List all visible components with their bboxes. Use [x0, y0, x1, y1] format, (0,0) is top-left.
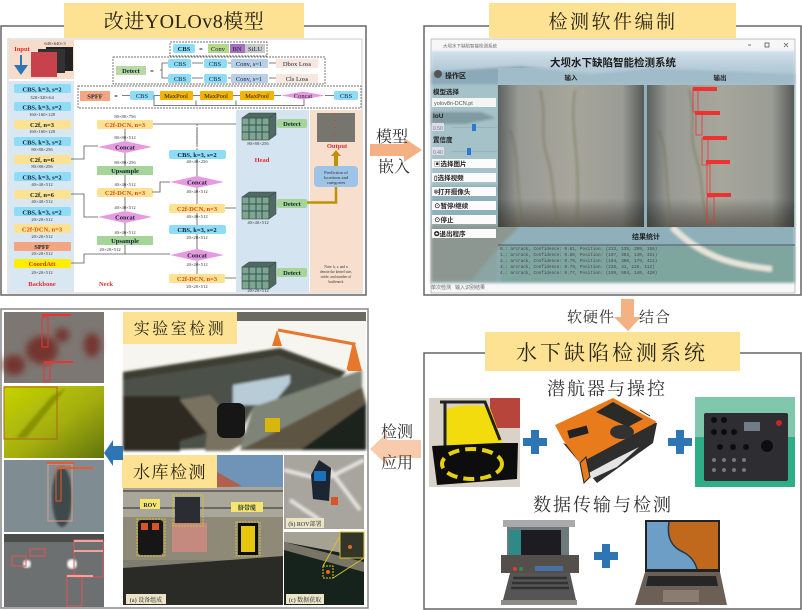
- sidebar controls: ⊙停止: [434, 215, 454, 224]
- background landscape: [431, 51, 795, 283]
- heading: laboratory test: 实验室检测: [134, 320, 226, 338]
- CBS definition: =: [199, 46, 203, 53]
- sidebar controls: ▣选择图片: [434, 159, 466, 168]
- PAN column: 40×40×256: [186, 159, 208, 164]
- output column: Prediction of: [324, 170, 348, 175]
- subheading: vehicle and control: 潜航器与操控: [547, 379, 667, 399]
- neck column: C2f-DCN, n=3: [105, 190, 146, 197]
- photo: dark wall cracks: [4, 534, 104, 607]
- SPFF definition: CBS: [340, 93, 353, 100]
- icon: plus: [668, 430, 692, 454]
- panel: experiments: [1, 309, 368, 608]
- SPFF definition: MaxPool: [204, 93, 228, 100]
- status bar: 输入识别结果: [455, 284, 485, 291]
- backbone column: 40×40×512: [31, 182, 53, 187]
- sidebar controls: yolov8n-DCN.pt: [434, 101, 473, 107]
- neck column: 40×40×512: [114, 205, 136, 210]
- PAN column: CBS, k=3, s=2: [177, 227, 217, 234]
- backbone column: [9, 81, 74, 292]
- Detect definition: CBS: [209, 61, 222, 68]
- PAN column: 20×20×512: [186, 284, 208, 289]
- backbone column: 20×20×512: [31, 270, 53, 275]
- photo: laptop: [635, 520, 727, 605]
- SPFF definition: MaxPool: [245, 93, 269, 100]
- arrow: detection application: [370, 423, 421, 472]
- neck column: 80×80×256: [114, 160, 136, 165]
- results area: 2.: arcrack, Confidence: 0.79, Position: (194, 300, 179, 411): [500, 259, 657, 264]
- photo: cable reel: [429, 398, 520, 487]
- sidebar controls: ▯选择视频: [434, 173, 464, 182]
- icon: plus: [523, 430, 547, 454]
- Detect definition: Detect: [122, 68, 141, 75]
- input block: [9, 40, 74, 79]
- Detect definition: [113, 57, 325, 84]
- output column: categories: [327, 180, 346, 185]
- neck column: Concat: [115, 144, 136, 152]
- neck column: 80×80×756: [114, 114, 136, 119]
- sidebar controls: [432, 70, 497, 238]
- output column: [307, 110, 362, 292]
- Detect definition: Cls Loss: [286, 76, 309, 83]
- head column: Detect: [283, 201, 302, 208]
- PAN column: C2f-DCN, n=3: [177, 206, 218, 213]
- PAN column: 40×40×512: [186, 214, 208, 219]
- photo: rust damage: [3, 312, 104, 383]
- CBS definition: [170, 42, 267, 56]
- results area: 4.: arcrack, Confidence: 0.77, Position: (199, 504, 140, 420): [500, 271, 657, 276]
- input block: 640×640×3: [44, 41, 66, 46]
- neck column: 40×40×512: [114, 230, 136, 235]
- CBS definition: CBS: [178, 46, 191, 53]
- Detect definition: Conv, s=1: [236, 61, 262, 68]
- subheading: data transmission: 数据传输与检测: [533, 495, 673, 515]
- CBS definition: BN: [232, 46, 242, 53]
- backbone column: CBS, k=3, s=2: [22, 86, 62, 94]
- arrow: hardware software combination: [567, 299, 671, 331]
- heading: detection system: 水下缺陷检测系统: [516, 341, 708, 365]
- output column: Output: [327, 143, 348, 150]
- head column: Detect: [283, 270, 302, 277]
- backbone column: CoordAtt: [29, 261, 56, 268]
- neck column: C2f-DCN, n=3: [105, 122, 146, 129]
- backbone column: 320×320×64: [30, 95, 54, 100]
- backbone column: SPFF: [34, 244, 50, 251]
- backbone column: CBS, k=3, s=2: [22, 140, 62, 146]
- arrow: model embedding: 嵌入: [378, 158, 410, 176]
- backbone column: CBS, k=3, s=2: [22, 174, 62, 182]
- arrow: model embedding: 模型: [376, 127, 408, 146]
- backbone column: 20×20×512: [31, 251, 53, 256]
- backbone column: CBS, k=3, s=2: [22, 104, 62, 112]
- head column: [236, 110, 309, 293]
- sidebar controls: 模型选择: [433, 87, 460, 96]
- neck column: Neck: [99, 281, 113, 288]
- sidebar controls: ✪退出程序: [434, 229, 466, 238]
- results area: [498, 232, 795, 276]
- neck column: Upsample: [111, 168, 139, 175]
- software window: [431, 39, 795, 293]
- head column: Head: [255, 157, 270, 164]
- software window: 大坝水下缺陷智能检测系统: [550, 56, 676, 69]
- input block: Input: [14, 46, 31, 53]
- photo: field console: [501, 520, 579, 605]
- sidebar controls: IoU: [433, 113, 444, 120]
- results area: 3.: arcrack, Confidence: 0.79, Position: (238, 41, 226, 112): [500, 265, 655, 270]
- software window: 输出: [714, 73, 726, 82]
- heading: reservoir test: 水库检测: [133, 463, 207, 482]
- photo: data acquisition: (c) 数据获取: [289, 596, 321, 604]
- arrow: model embedding: [370, 127, 422, 176]
- head column: 20×20×512: [247, 288, 269, 293]
- backbone column: CBS, k=3, s=2: [22, 210, 62, 216]
- arrow: detection application: 检测: [381, 423, 413, 441]
- backbone column: 40×40×512: [31, 199, 53, 204]
- software window: 大坝水下缺陷智能检测系统: [443, 42, 497, 50]
- output column: denote the kernel size,: [320, 270, 352, 275]
- backbone column: C2f-DCN, n=3: [22, 226, 63, 234]
- backbone column: Backbone: [28, 281, 56, 288]
- arrow: result blue: [104, 440, 123, 466]
- heading: reservoir test: [122, 455, 217, 488]
- photo: algae green: [4, 386, 104, 458]
- sidebar controls: 置信度: [433, 135, 453, 144]
- heading: improved YOLOv8: 改进YOLOv8模型: [104, 10, 264, 33]
- heading: laboratory test: [123, 312, 237, 344]
- photo: spalling: [4, 460, 104, 532]
- neck column: Upsample: [111, 238, 139, 245]
- SPFF definition: MaxPool: [164, 93, 188, 100]
- heading: improved YOLOv8: [64, 3, 304, 38]
- Detect definition: Conv, s=1: [236, 76, 262, 83]
- head column: 80×80×256: [247, 141, 269, 146]
- backbone column: 160×160×128: [29, 129, 56, 134]
- photo: reservoir equipment: (a) 设备组成: [130, 596, 162, 604]
- PAN column: Concat: [187, 252, 208, 260]
- SPFF definition: Concat: [294, 93, 312, 100]
- photo: ROV: [555, 398, 657, 483]
- CBS definition: SiLU: [248, 46, 262, 53]
- SPFF definition: [78, 86, 361, 108]
- photo: data acquisition: [284, 532, 364, 605]
- sidebar controls: 0.50: [433, 126, 443, 132]
- Detect definition: CBS: [174, 76, 187, 83]
- neck column: 20×20×512: [99, 247, 121, 252]
- backbone column: C2f, n=6: [30, 192, 55, 199]
- arrow: hardware software combination: 结合: [639, 309, 671, 326]
- sidebar controls: ⌾打开摄像头: [434, 187, 471, 196]
- head column: Detect: [283, 121, 302, 128]
- panel: underwater defect detection system: [424, 332, 801, 609]
- photo: reservoir equipment: [123, 455, 283, 605]
- results area: 1.: arcrack, Confidence: 0.80, Position: (197, 403, 140, 321): [500, 253, 657, 258]
- Detect definition: =: [150, 68, 154, 75]
- sidebar controls: 0.40: [433, 150, 443, 156]
- PAN column: 40×40×512: [186, 189, 208, 194]
- software window: 输入: [564, 73, 578, 82]
- results area: 0.: arcrack, Confidence: 0.81, Position: (213, 135, 299, 155): [500, 247, 657, 252]
- input photo: [498, 85, 644, 227]
- output photo: [647, 85, 794, 227]
- panel: detection software: [424, 3, 801, 295]
- SPFF definition: SPFF: [87, 94, 103, 100]
- sidebar controls: 操作区: [445, 71, 466, 80]
- PAN column: CBS, k=3, s=2: [177, 152, 217, 159]
- arrow: detection application: 应用: [381, 454, 413, 472]
- PAN column: C2f-DCN, n=3: [177, 276, 218, 283]
- PAN column: Concat: [187, 180, 208, 186]
- status bar: [431, 284, 485, 291]
- neck column: [71, 114, 242, 288]
- panel: improved YOLOv8 model: [1, 3, 366, 295]
- backbone column: 160×160×128: [29, 112, 56, 117]
- backbone column: 20×20×512: [31, 234, 53, 239]
- backbone column: 80×80×256: [31, 147, 53, 152]
- head column: 40×40×512: [247, 220, 269, 225]
- heading: detection system: [485, 332, 740, 371]
- status bar: 单次检测: [431, 284, 451, 291]
- backbone column: 20×20×512: [31, 217, 53, 222]
- PAN column: 20×20×512: [186, 235, 208, 240]
- Detect definition: CBS: [174, 61, 187, 68]
- photo: reservoir equipment: ROV: [143, 503, 157, 509]
- arrow: hardware software combination: 软硬件: [567, 309, 615, 326]
- output column: stride, and number of: [321, 275, 352, 280]
- photo: reservoir equipment: 脐带缆: [238, 504, 256, 512]
- heading: detection software: [489, 3, 736, 38]
- results area: 结果统计: [632, 232, 660, 241]
- Detect definition: Dbox Loss: [283, 61, 312, 68]
- SPFF definition: =: [114, 94, 118, 100]
- photo: ROV deployment: [284, 455, 364, 529]
- output column: Note: k, s, and n: [324, 265, 348, 270]
- CBS definition: Conv: [211, 46, 226, 53]
- neck column: Concat: [115, 214, 136, 222]
- photo: ROV deployment: (b) ROV部署: [288, 520, 322, 528]
- neck column: 40×40×512: [114, 182, 136, 187]
- output column: locations and: [324, 175, 349, 180]
- PAN column: [169, 150, 242, 289]
- backbone column: C2f, n=6: [30, 157, 55, 164]
- SPFF definition: CBS: [136, 93, 149, 100]
- photo: laboratory tank: [123, 312, 366, 451]
- backbone column: 80×80×256: [31, 164, 53, 169]
- sidebar controls: ⊙暂停/继续: [434, 201, 469, 210]
- icon: plus: [594, 544, 618, 568]
- neck column: 80×80×512: [114, 135, 136, 140]
- output column: bottleneck: [329, 280, 344, 284]
- Detect definition: CBS: [209, 76, 222, 83]
- photo: control box: [695, 397, 795, 487]
- PAN column: 20×20×512: [186, 262, 208, 267]
- backbone column: C2f, n=3: [30, 122, 55, 129]
- heading: detection software: 检测软件编制: [548, 11, 678, 33]
